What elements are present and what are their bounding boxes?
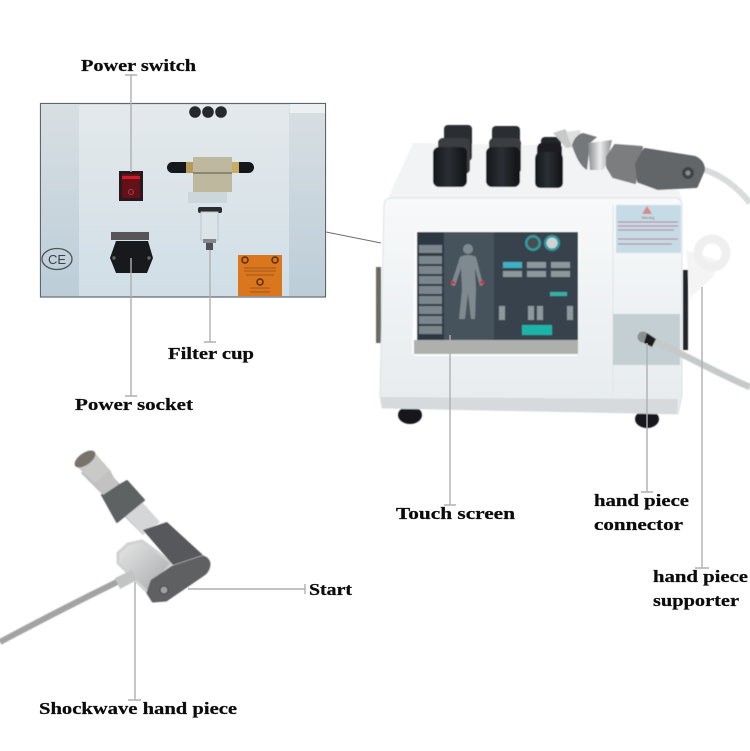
label: start: Start xyxy=(309,580,353,599)
icon: power switch xyxy=(119,171,143,201)
label: touch screen: Touch screen xyxy=(396,504,515,523)
screen body figure xyxy=(451,244,484,319)
connector panel xyxy=(613,314,680,365)
rubber grip xyxy=(102,481,144,522)
cable connector xyxy=(115,570,137,589)
screen frame xyxy=(412,230,580,356)
hand piece connector xyxy=(638,332,656,347)
icon: power socket xyxy=(110,232,153,273)
label: hand piece supporter: supporter xyxy=(653,591,739,610)
bottles, front row xyxy=(433,147,563,188)
machine top surface xyxy=(384,143,683,207)
label: filter cup: Filter cup xyxy=(168,344,254,363)
icon: orange warning label xyxy=(238,255,282,296)
label: power switch: Power switch xyxy=(81,56,196,75)
icon: CE mark: CE xyxy=(48,252,66,267)
cable xyxy=(0,582,117,642)
main machine xyxy=(376,125,750,428)
neck and tip xyxy=(72,447,118,495)
screen menu buttons xyxy=(419,245,442,334)
icon: filter cup xyxy=(167,157,254,250)
bottles, back rows xyxy=(438,125,562,174)
label: power socket: Power socket xyxy=(75,395,194,414)
dark top strip xyxy=(143,522,203,565)
machine feet xyxy=(398,406,659,428)
screen mode icons xyxy=(525,235,560,251)
cable: upper hand piece xyxy=(702,169,750,203)
lower cable xyxy=(652,340,750,387)
label: hand piece supporter: hand piece xyxy=(653,567,748,586)
icon: CE mark xyxy=(42,248,72,270)
detail panel: rear of machine xyxy=(40,104,326,297)
leader lines xyxy=(125,75,709,700)
label: hand piece connector xyxy=(594,491,689,534)
silver barrel underlay xyxy=(88,466,150,528)
touch screen xyxy=(414,232,578,354)
connector line from panel to machine xyxy=(326,232,381,243)
label: hand piece supporter xyxy=(653,567,748,610)
screen start button xyxy=(522,325,552,335)
warning label xyxy=(616,205,681,253)
dark end cap with start button xyxy=(148,557,209,601)
label: hand piece connector: connector xyxy=(594,515,683,534)
screen setting buttons xyxy=(499,262,573,320)
label: hand piece connector: hand piece xyxy=(594,491,689,510)
label: shockwave hand piece: Shockwave hand piece xyxy=(39,699,237,718)
icon: three black ports xyxy=(189,106,227,118)
silver shaft xyxy=(122,502,160,535)
upper hand piece xyxy=(553,129,703,188)
hand piece supporter ring xyxy=(686,239,726,298)
warning label: Warning xyxy=(642,216,655,220)
machine front body xyxy=(380,198,682,414)
small shockwave hand piece xyxy=(0,447,209,642)
silver housing xyxy=(118,541,172,592)
